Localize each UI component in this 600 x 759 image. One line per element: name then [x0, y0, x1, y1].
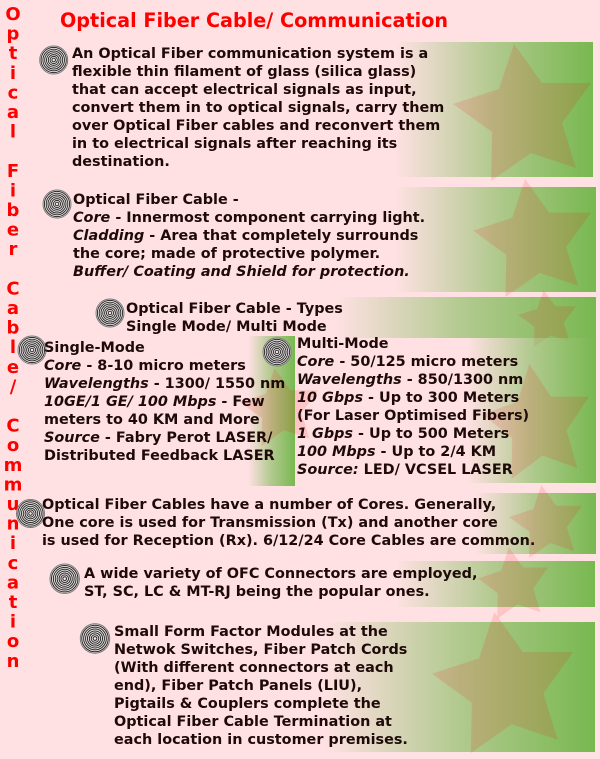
- text: optical fiber cable parts: the core; made of protective polymer.: [73, 246, 380, 262]
- vertical title: C: [6, 416, 20, 437]
- panel: single-mode background: [240, 336, 318, 486]
- vertical title: m: [4, 474, 22, 495]
- text: cores: [42, 497, 535, 549]
- vertical title: a: [7, 572, 19, 593]
- text: optical fiber cable parts: Cladding - Area that completely surrounds: [73, 228, 418, 244]
- text: multi-mode: 10 Gbps - Up to 300 Meters: [297, 390, 519, 406]
- vertical title: b: [7, 318, 20, 339]
- text: cable types: Single Mode/ Multi Mode: [126, 319, 327, 335]
- text: cable types: Optical Fiber Cable - Types: [126, 301, 343, 317]
- text: modules: each location in customer premises.: [114, 732, 408, 748]
- vertical title: l: [10, 122, 16, 143]
- panel: connectors background: [395, 547, 595, 619]
- text: single-mode: Core - 8-10 micro meters: [44, 358, 246, 374]
- vertical title: l: [10, 337, 16, 358]
- text: single-mode: 10GE/1 GE/ 100 Mbps - Few: [44, 394, 265, 410]
- vertical title: /: [10, 376, 17, 397]
- text: optical fiber cable parts: Core - Innermost component carrying light.: [73, 210, 425, 226]
- text: introduction: over Optical Fiber cables and reconvert them: [72, 118, 440, 134]
- text: connectors: A wide variety of OFC Connectors are employed,: [84, 566, 477, 582]
- text: single-mode: Wavelengths - 1300/ 1550 nm: [44, 376, 285, 392]
- vertical title: a: [7, 298, 19, 319]
- text: multi-mode: Multi-Mode: [297, 336, 389, 352]
- title: Optical Fiber Cable/ Communication: [60, 9, 448, 32]
- text: introduction: in to electrical signals after reaching its: [72, 136, 397, 152]
- text: cores: Optical Fiber Cables have a number of Cores. Generally,: [42, 497, 496, 513]
- text: introduction: that can accept electrical signals as input,: [72, 82, 417, 98]
- vertical title: o: [7, 435, 19, 456]
- vertical title: c: [8, 553, 18, 574]
- text: modules: Netwok Switches, Fiber Patch Cords: [114, 642, 407, 658]
- vertical title: F: [7, 161, 19, 182]
- text: connectors: [84, 566, 477, 600]
- text: optical fiber cable parts: [73, 192, 425, 280]
- vertical title: C: [6, 278, 20, 299]
- vertical title: i: [10, 612, 16, 633]
- text: single-mode: [44, 340, 285, 464]
- text: modules: (With different connectors at each: [114, 660, 394, 676]
- text: multi-mode: (For Laser Optimised Fibers): [297, 408, 529, 424]
- vertical title: n: [7, 651, 19, 672]
- vertical title: O: [5, 4, 21, 25]
- vertical title: p: [7, 24, 20, 45]
- text: multi-mode: 1 Gbps - Up to 500 Meters: [297, 426, 509, 442]
- text: connectors: ST, SC, LC & MT-RJ being the popular ones.: [84, 584, 430, 600]
- vertical title: t: [9, 592, 18, 613]
- panel: intro background: [395, 42, 593, 181]
- panel: types background: [335, 290, 596, 347]
- vertical title: [4, 4, 22, 672]
- text: cores: is used for Reception (Rx). 6/12/24 Core Cables are common.: [42, 533, 535, 549]
- icon: spiral 1: [40, 46, 68, 74]
- text: modules: Pigtails & Couplers complete the: [114, 696, 381, 712]
- vertical title: e: [7, 357, 19, 378]
- text: introduction: An Optical Fiber communication system is a: [72, 46, 428, 62]
- text: introduction: destination.: [72, 154, 170, 170]
- vertical title: c: [8, 82, 18, 103]
- icon: spiral 7: [50, 564, 79, 593]
- panel: multi-mode background: [467, 338, 596, 483]
- text: modules: Optical Fiber Cable Termination at: [114, 714, 392, 730]
- panel: modules background: [325, 612, 595, 753]
- icon: spiral 5: [263, 338, 291, 366]
- text: multi-mode: 100 Mbps - Up to 2/4 KM: [297, 444, 496, 460]
- vertical title: t: [9, 43, 18, 64]
- vertical title: n: [7, 514, 19, 535]
- text: single-mode: Source - Fabry Perot LASER/: [44, 430, 273, 446]
- text: multi-mode: Wavelengths - 850/1300 nm: [297, 372, 523, 388]
- text: single-mode: Distributed Feedback LASER: [44, 448, 275, 464]
- text: single-mode: meters to 40 KM and More: [44, 412, 260, 428]
- text: introduction: convert them in to optical signals, carry them: [72, 100, 444, 116]
- text: optical fiber cable parts: Optical Fiber Cable -: [73, 192, 239, 208]
- icon: spiral 6: [16, 500, 44, 528]
- text: modules: end), Fiber Patch Panels (LIU),: [114, 678, 362, 694]
- text: introduction: flexible thin filament of glass (silica glass): [72, 64, 416, 80]
- panel: cores background: [475, 485, 596, 558]
- vertical title: a: [7, 102, 19, 123]
- icon: spiral 8: [80, 624, 110, 653]
- vertical title: i: [10, 533, 16, 554]
- text: multi-mode: Source: LED/ VCSEL LASER: [297, 462, 513, 478]
- vertical title: i: [10, 180, 16, 201]
- text: single-mode: Single-Mode: [44, 340, 145, 356]
- vertical title: u: [7, 494, 19, 515]
- text: modules: [114, 624, 408, 748]
- text: multi-mode: Core - 50/125 micro meters: [297, 354, 518, 370]
- icon: spiral 2: [43, 190, 71, 218]
- icon: spiral 3: [96, 299, 124, 327]
- text: introduction: [72, 46, 444, 170]
- vertical title: b: [7, 200, 20, 221]
- vertical title: o: [7, 631, 19, 652]
- vertical title: m: [4, 455, 22, 476]
- vertical title: i: [10, 63, 16, 84]
- text: cable types: [126, 301, 343, 335]
- icon: spiral 4: [18, 336, 46, 364]
- text: optical fiber cable parts: Buffer/ Coating and Shield for protection.: [73, 264, 410, 280]
- panel: fiber cable background: [395, 179, 596, 297]
- vertical title: r: [9, 239, 18, 260]
- text: modules: Small Form Factor Modules at the: [114, 624, 388, 640]
- text: multi-mode: [297, 336, 529, 478]
- vertical title: e: [7, 220, 19, 241]
- text: cores: One core is used for Transmission (Tx) and another core: [42, 515, 498, 531]
